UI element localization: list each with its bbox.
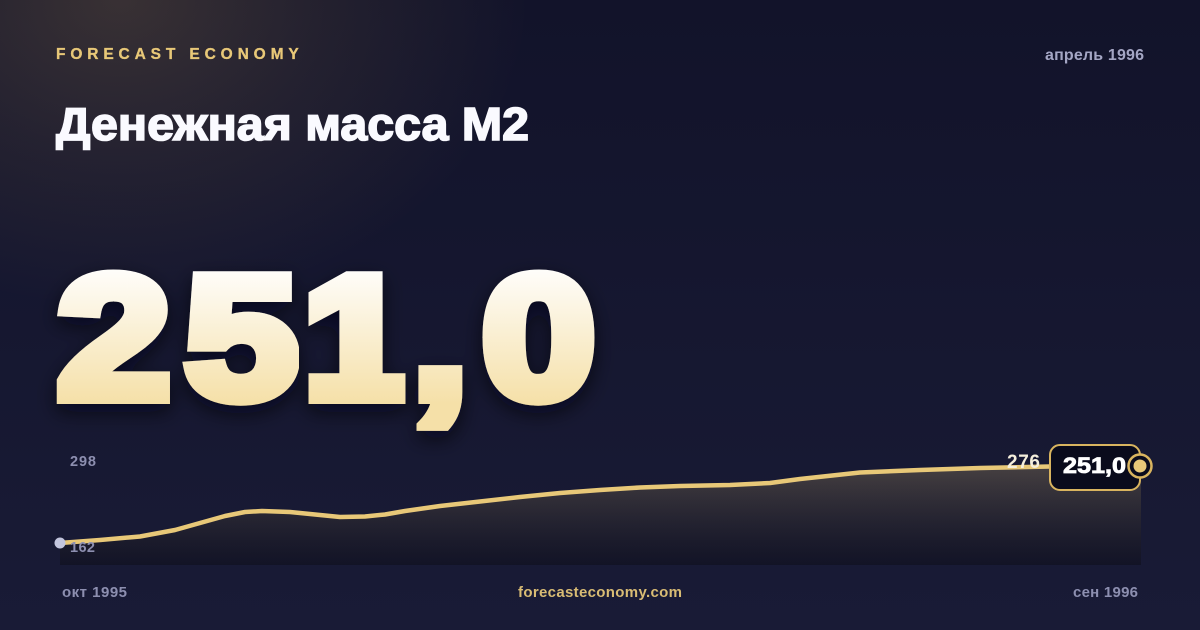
start date label: окт 1995	[62, 584, 127, 601]
website: forecasteconomy.com	[518, 584, 682, 601]
start point marker	[54, 538, 66, 548]
end date label: сен 1996	[1073, 584, 1138, 601]
chart line	[60, 466, 1141, 543]
area chart	[60, 466, 1141, 565]
chart area fill	[60, 466, 1141, 565]
axis min label: 162	[70, 540, 95, 556]
current value callout	[1050, 445, 1152, 490]
date label: апрель 1996	[1045, 47, 1144, 64]
peak value label: 276	[1007, 452, 1040, 473]
title: Денежная масса М2	[56, 98, 529, 150]
end point marker	[1128, 454, 1152, 478]
callout value: 251,0	[1063, 453, 1126, 478]
callout box	[1050, 445, 1140, 490]
big number: 251,0	[57, 241, 595, 435]
axis max label: 298	[70, 454, 96, 470]
brand label: FORECAST ECONOMY	[56, 46, 303, 63]
